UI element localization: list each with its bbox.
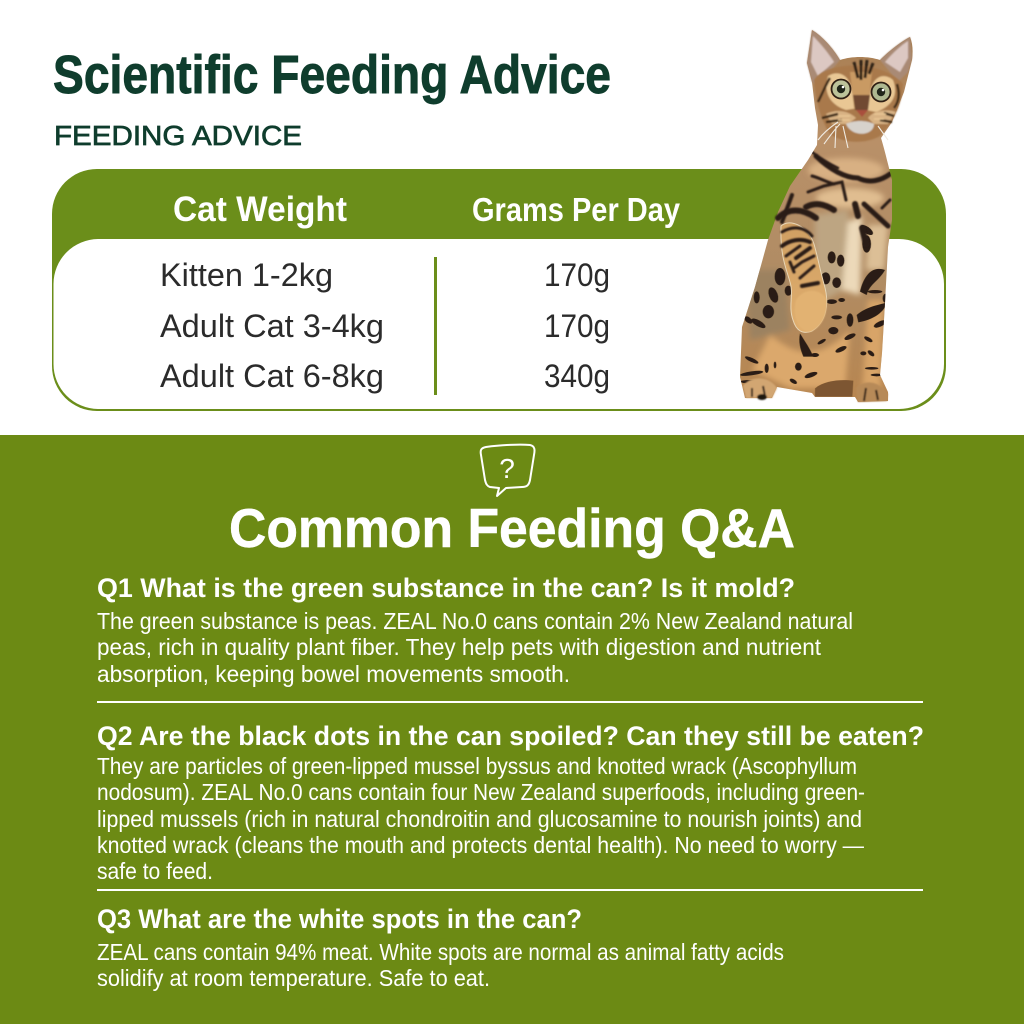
Q2 block: lipped mussels (rich in natural chondroitin and glucosamine to nourish joints) and	[97, 806, 862, 832]
icon: bengal cat	[740, 30, 913, 402]
cat face	[814, 60, 903, 142]
Q2 block: safe to feed.	[97, 858, 213, 884]
Q1 block: absorption, keeping bowel movements smooth.	[97, 661, 570, 687]
Q2 block: Q2 Are the black dots in the can spoiled? Can they still be eaten?	[97, 721, 924, 751]
Q2 block	[97, 721, 924, 884]
Q1 block: Q1 What is the green substance in the can? Is it mold?	[97, 573, 795, 603]
row 3 grams: 340g	[544, 358, 610, 394]
Q3 block: Q3 What are the white spots in the can?	[97, 904, 582, 934]
bubble question mark: ?	[499, 453, 515, 484]
Q1 block	[97, 573, 853, 687]
Q2 block: nodosum). ZEAL No.0 cans contain four New Zealand superfoods, including green-	[97, 779, 865, 805]
cat chest stripes	[782, 152, 890, 244]
Q3 block	[97, 904, 784, 991]
Q3 block: ZEAL cans contain 94% meat. White spots are normal as animal fatty acids	[97, 939, 784, 965]
header: grams per day: Grams Per Day	[472, 191, 681, 228]
Q1 block: The green substance is peas. ZEAL No.0 cans contain 2% New Zealand natural	[97, 608, 853, 634]
cat eyes	[832, 80, 890, 102]
cat body markings	[740, 223, 889, 397]
header: cat weight: Cat Weight	[173, 190, 347, 229]
panel: common feeding Q&A	[0, 435, 1024, 1024]
Q2 block: They are particles of green-lipped mussel byssus and knotted wrack (Ascophyllum	[97, 753, 857, 779]
cat hind paws	[743, 378, 888, 402]
row 3 weight: Adult Cat 6-8kg	[160, 358, 384, 394]
title: Scientific Feeding Advice	[53, 45, 611, 105]
cat ears	[807, 30, 912, 86]
panel: feeding table	[52, 169, 946, 411]
row 1 weight: Kitten 1-2kg	[160, 257, 333, 293]
row 2 weight: Adult Cat 3-4kg	[160, 308, 384, 344]
divider 2	[97, 889, 923, 891]
Q2 block: knotted wrack (cleans the mouth and protects dental health). No need to worry —	[97, 832, 864, 858]
cat whiskers	[818, 122, 888, 148]
row 2 grams: 170g	[544, 308, 610, 344]
Q1 block: peas, rich in quality plant fiber. They help pets with digestion and nutrient	[97, 634, 822, 660]
Q3 block: solidify at room temperature. Safe to eat.	[97, 965, 490, 991]
icon: question speech bubble	[481, 445, 535, 496]
column divider	[434, 257, 437, 395]
section heading: Common Feeding Q&A	[229, 497, 795, 559]
green background	[0, 435, 1024, 1024]
table body	[53, 239, 944, 409]
cat raised paw	[778, 210, 827, 332]
row 1 grams: 170g	[544, 257, 610, 293]
cat fur shading	[740, 152, 890, 397]
table header band	[52, 169, 946, 411]
divider 1	[97, 701, 923, 703]
subtitle: FEEDING ADVICE	[54, 120, 302, 151]
